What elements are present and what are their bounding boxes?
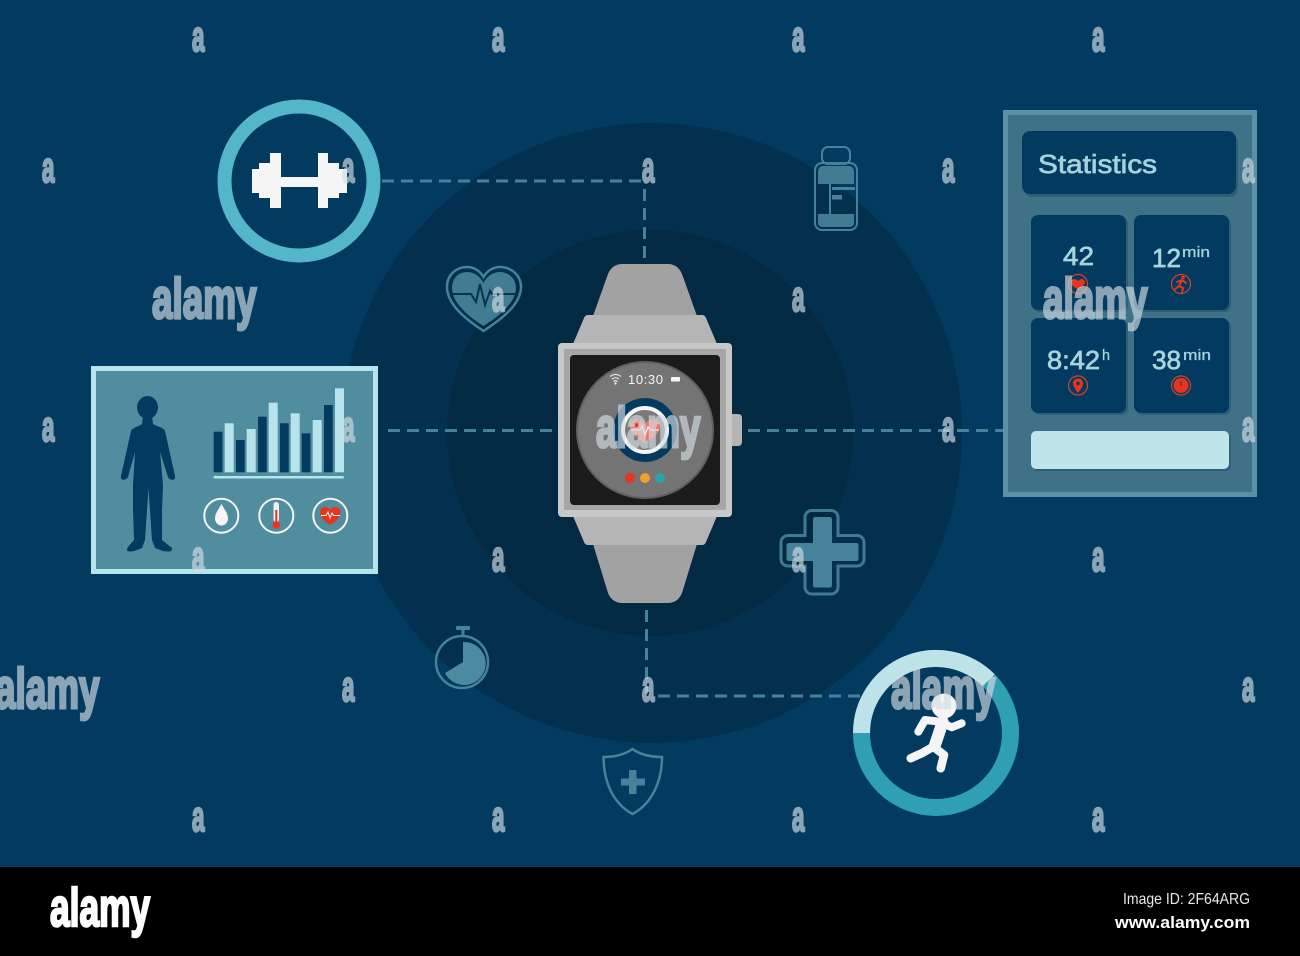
watermarks: alamy <box>1043 268 1148 331</box>
watermarks: a <box>42 144 55 192</box>
watch screen <box>570 355 720 505</box>
watch strap <box>593 264 697 603</box>
watermarks: a <box>792 13 805 61</box>
stat tile: 8:42 h <box>1031 318 1128 415</box>
watermarks: a <box>342 403 355 451</box>
status dots <box>625 473 665 483</box>
outer background circle <box>342 123 962 743</box>
watch case <box>558 343 732 517</box>
watermarks: a <box>492 793 505 841</box>
icon: battery <box>671 377 680 382</box>
heading: statistics: Statistics <box>1038 149 1157 179</box>
watermarks: a <box>192 13 205 61</box>
watermarks: a <box>1242 403 1255 451</box>
watermarks: a <box>492 13 505 61</box>
action bar <box>1031 431 1231 471</box>
icon: heart rate <box>313 499 347 533</box>
watermarks: a <box>642 144 655 192</box>
image id: Image ID: 2F64ARG <box>1123 891 1250 908</box>
watermarks: alamy <box>152 268 257 331</box>
watermarks: alamy <box>596 397 701 460</box>
icon: water drop <box>204 499 238 533</box>
watermarks: a <box>1092 13 1105 61</box>
smartwatch <box>558 264 742 603</box>
stat tile: 38 min <box>1134 318 1231 415</box>
watch crown <box>732 414 742 446</box>
watch lugs <box>573 315 717 545</box>
watermarks: a <box>1242 144 1255 192</box>
watermarks: a <box>192 793 205 841</box>
watch bezel <box>564 349 726 510</box>
watermarks: a <box>1092 533 1105 581</box>
watermarks: a <box>42 403 55 451</box>
icon: stopwatch <box>436 626 488 688</box>
icon: human silhouette <box>121 396 175 552</box>
stat tile: 42: 42 <box>1063 241 1094 271</box>
watermarks: a <box>492 533 505 581</box>
watermarks: a <box>642 663 655 711</box>
watermarks: a <box>942 403 955 451</box>
stat tile: 12 min: min <box>1182 244 1210 261</box>
panel: body metrics <box>94 368 376 572</box>
watermarks: a <box>342 144 355 192</box>
icon: thermometer <box>259 499 293 533</box>
icon: dumbbell in ring <box>224 106 374 256</box>
watermarks: alamy <box>891 658 996 721</box>
footer band <box>0 867 1300 956</box>
stat tile: 38 min: min <box>1183 347 1211 364</box>
watermarks: a <box>792 793 805 841</box>
watermarks: a <box>1092 793 1105 841</box>
panel: statistics <box>1006 112 1254 494</box>
icon: runner in progress ring <box>862 658 1010 808</box>
icon: wifi <box>610 374 621 384</box>
watermarks: a <box>492 273 505 321</box>
watermarks: a <box>192 533 205 581</box>
watermarks: a <box>792 533 805 581</box>
icon: medicine bottle <box>815 147 857 230</box>
stat tile: 8:42 h: 8:42 <box>1047 345 1100 375</box>
watermarks: a <box>342 663 355 711</box>
watermarks: a <box>1242 663 1255 711</box>
stat tile: 38 min: 38 <box>1152 345 1181 375</box>
heading: statistics <box>1022 131 1238 197</box>
bar chart <box>214 388 344 478</box>
heart rate badge <box>613 398 677 462</box>
stat tile: 12 min: 12 <box>1152 243 1181 273</box>
watermarks: a <box>942 144 955 192</box>
icon: shield with plus <box>604 749 662 814</box>
watch face <box>576 361 714 499</box>
stat tile: 12 min <box>1134 215 1231 312</box>
icon: medical cross <box>781 510 864 594</box>
stat tile: 42 <box>1031 215 1128 312</box>
inner background circle <box>447 230 853 636</box>
stat tile: 8:42 h: h <box>1102 347 1110 364</box>
dashed connectors <box>382 181 1003 696</box>
icon: heart with pulse <box>447 267 521 331</box>
watermarks: a <box>792 273 805 321</box>
time: 10:30 <box>628 372 663 387</box>
website: www.alamy.com <box>1114 913 1250 932</box>
footer logo: alamy <box>50 877 151 938</box>
